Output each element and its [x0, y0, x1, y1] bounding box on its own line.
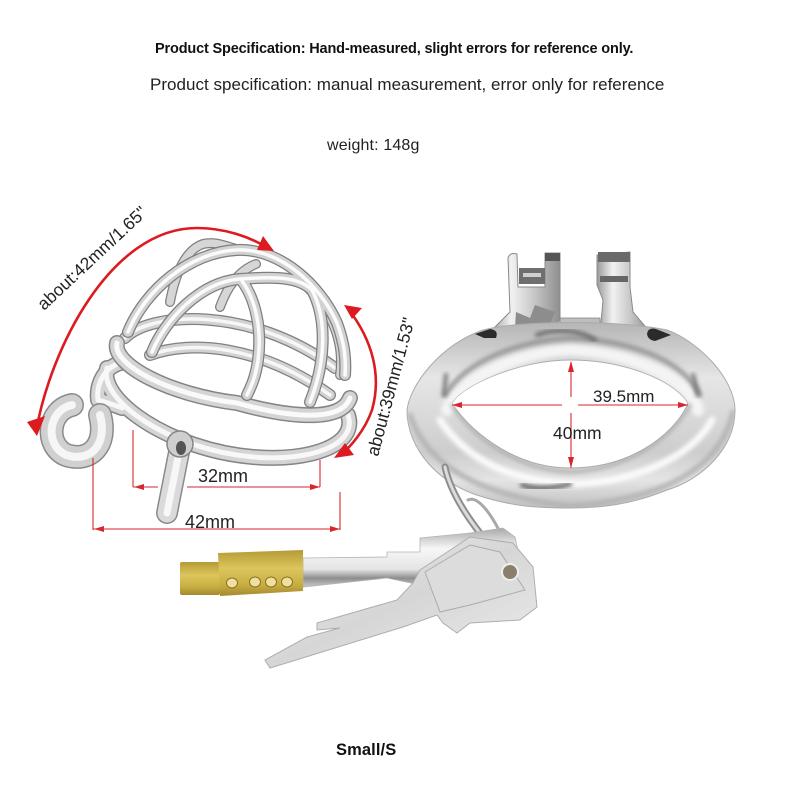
cage bars — [128, 250, 345, 402]
dimension: 42mm — [93, 458, 340, 532]
ring shading — [410, 331, 733, 506]
lock hook — [52, 405, 102, 457]
ring body — [407, 322, 735, 508]
red curved arrow: 39mm — [334, 305, 376, 458]
key hole — [502, 564, 518, 580]
ring slots — [475, 329, 497, 338]
base rings — [98, 343, 350, 458]
dimension: 39.5mm: 39.5mm — [593, 387, 654, 406]
dimension: 40mm — [553, 361, 602, 468]
size label: Small/S — [336, 741, 396, 759]
back rings — [125, 319, 335, 395]
dimension: 40mm: 40mm — [553, 423, 602, 443]
dimension: 39.5mm — [452, 387, 688, 408]
dimension: 42mm: 42mm — [185, 512, 235, 532]
left cage — [52, 243, 350, 513]
curved arrow label: 39mm: about:39mm/1.53" — [363, 315, 419, 458]
lower key — [265, 537, 537, 668]
weight label: weight: 148g — [327, 137, 420, 154]
upper key — [303, 528, 520, 587]
dimension: 32mm: 32mm — [198, 466, 248, 486]
subtitle: manual measurement note: Product specification: manual measurement, error only for reference — [150, 75, 664, 94]
lock pin — [167, 431, 193, 513]
key ring — [445, 467, 512, 568]
brass lock cylinder — [180, 550, 303, 596]
curved arrow label: 42mm: about:42mm/1.65" — [33, 202, 151, 314]
right ring — [407, 252, 735, 508]
title: product specification: Product Specification: Hand-measured, slight errors for reference only. — [155, 41, 633, 57]
back bars — [170, 243, 341, 375]
red curved arrow: 42mm — [27, 228, 274, 436]
lock tabs — [490, 252, 650, 335]
keys — [265, 528, 537, 668]
product diagram — [27, 206, 736, 669]
dimension: 32mm — [133, 430, 320, 490]
